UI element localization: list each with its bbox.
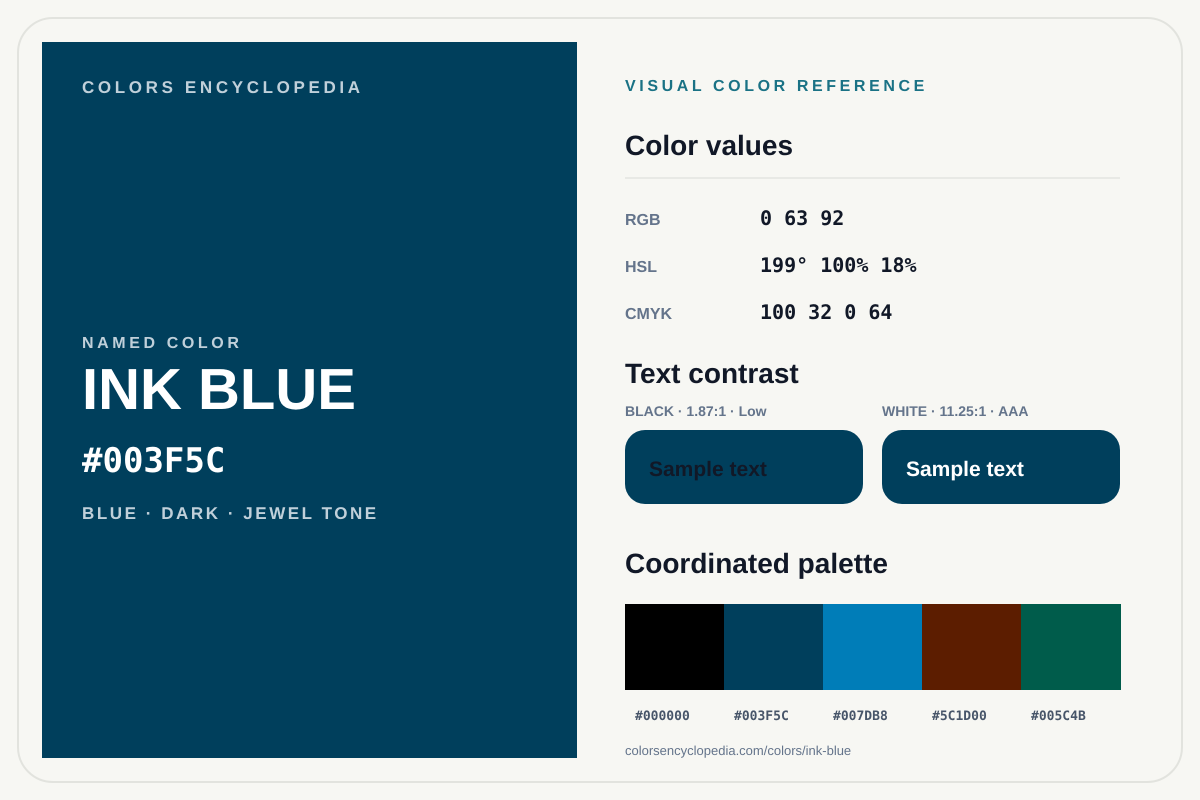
hex code: #003F5C: [82, 441, 225, 481]
hex label 5C1D00: #5C1D00: [932, 709, 987, 724]
heading: color values: Color values: [625, 130, 793, 161]
label: black contrast: BLACK · 1.87:1 · Low: [625, 403, 767, 419]
sample text white: Sample text: [906, 458, 1024, 481]
value: RGB: 0 63 92: [760, 206, 844, 230]
divider: [625, 177, 1120, 179]
label: HSL: HSL: [625, 259, 657, 276]
value: HSL: 199° 100% 18%: [760, 253, 917, 277]
color tags: BLUE · DARK · JEWEL TONE: [82, 504, 379, 523]
hex label 003F5C: #003F5C: [734, 709, 789, 724]
heading: coordinated palette: Coordinated palette: [625, 548, 888, 579]
swatch 007DB8: [823, 604, 922, 690]
label: white contrast: WHITE · 11.25:1 · AAA: [882, 403, 1029, 419]
label: RGB: RGB: [625, 212, 661, 229]
swatch 5C1D00: [922, 604, 1021, 690]
swatch 000000: [625, 604, 724, 690]
panel: color hero: [42, 42, 577, 758]
value: CMYK: 100 32 0 64: [760, 300, 892, 324]
sample: white text: [882, 430, 1120, 504]
source url: colorsencyclopedia.com/colors/ink-blue: [625, 743, 851, 758]
palette swatches: [625, 604, 1121, 690]
heading: text contrast: Text contrast: [625, 358, 799, 389]
hex label 000000: #000000: [635, 709, 690, 724]
color name: INK BLUE: [82, 357, 356, 422]
sample text black: Sample text: [649, 458, 767, 481]
section eyebrow: VISUAL COLOR REFERENCE: [625, 78, 928, 95]
hex label 005C4B: #005C4B: [1031, 709, 1086, 724]
hex label 007DB8: #007DB8: [833, 709, 888, 724]
swatch 003F5C: [724, 604, 823, 690]
swatch 005C4B: [1021, 604, 1121, 690]
label: CMYK: CMYK: [625, 306, 672, 323]
brand label: COLORS ENCYCLOPEDIA: [82, 78, 364, 97]
named color label: NAMED COLOR: [82, 335, 242, 352]
sample: black text: [625, 430, 863, 504]
